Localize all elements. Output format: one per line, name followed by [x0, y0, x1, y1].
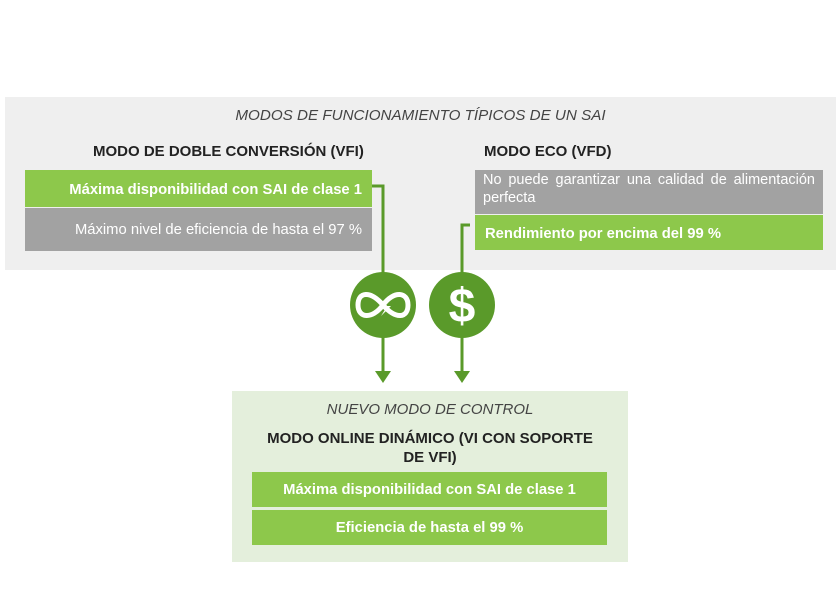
box: efficiency 99	[252, 510, 607, 545]
icon: dollar	[429, 272, 495, 338]
box: efficiency 97: Máximo nivel de eficiencia de hasta el 97 %	[75, 222, 362, 238]
box: efficiency 99: Eficiencia de hasta el 99 %	[336, 520, 523, 536]
panel: new control mode	[232, 391, 628, 562]
heading: online dynamic: MODO ONLINE DINÁMICO (VI CON SOPORTE DE VFI)	[267, 430, 593, 466]
heading: double conversion: MODO DE DOBLE CONVERSIÓN (VFI)	[93, 143, 364, 160]
box: availability: Máxima disponibilidad con SAI de clase 1	[283, 482, 576, 498]
heading: typical modes: MODOS DE FUNCIONAMIENTO TÍPICOS DE UN SAI	[235, 107, 606, 124]
icon: dollar: $	[449, 280, 476, 333]
heading: eco mode: MODO ECO (VFD)	[484, 143, 612, 160]
icon: infinity plug	[350, 272, 416, 338]
box: efficiency 97	[25, 208, 372, 251]
box: no guarantee: No puede garantizar una calidad de alimentación perfecta	[483, 172, 815, 206]
panel: typical modes	[5, 97, 836, 270]
heading: new mode: NUEVO MODO DE CONTROL	[327, 401, 533, 418]
box: max availability: Máxima disponibilidad con SAI de clase 1	[69, 182, 362, 198]
box: performance 99: Rendimiento por encima del 99 %	[485, 226, 721, 242]
box: availability	[252, 472, 607, 507]
box: performance 99	[475, 215, 823, 250]
box: max availability	[25, 170, 372, 207]
